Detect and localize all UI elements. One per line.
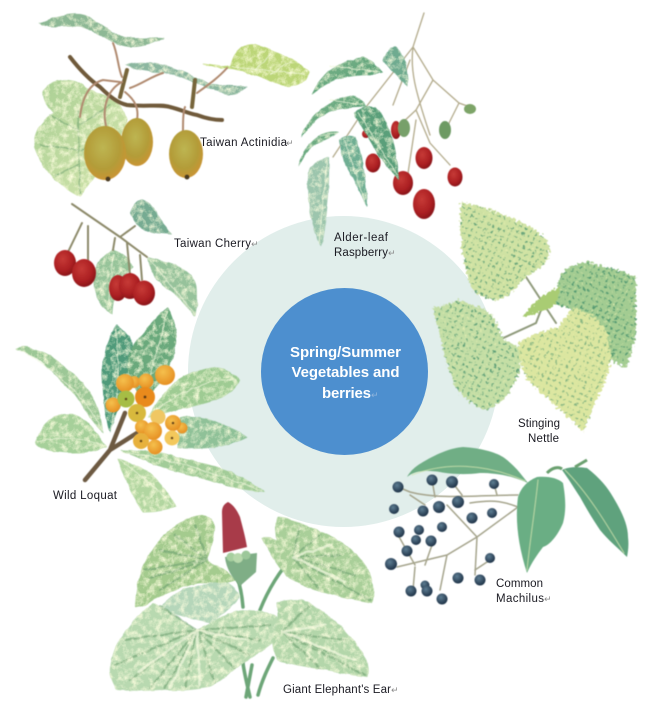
raspberry stems — [333, 13, 470, 180]
raspberry leaves — [298, 47, 408, 247]
machilus leaves — [407, 447, 628, 573]
elephant ear stems — [237, 557, 293, 697]
elephant ear leaves — [110, 515, 373, 691]
label: Alder-leaf Raspberry — [334, 232, 396, 259]
label: Taiwan Cherry: ↵ — [251, 240, 259, 250]
machilus berries — [385, 474, 499, 604]
inner blue circle with title: ↵ — [371, 391, 379, 401]
plant: Taiwan Actinidia — [34, 14, 310, 197]
label: Taiwan Actinidia: Taiwan Actinidia — [200, 137, 288, 149]
label: Stinging Nettle: Stinging — [518, 418, 560, 430]
inner blue circle with title: berries — [322, 385, 371, 402]
label: Taiwan Cherry: Taiwan Cherry — [174, 238, 251, 250]
nettle stems — [499, 277, 556, 340]
label: Stinging Nettle — [518, 418, 560, 445]
actinidia branch — [70, 43, 227, 132]
label: Alder-leaf Raspberry: Alder-leaf — [334, 232, 389, 244]
raspberry berries — [362, 104, 476, 219]
plant: Taiwan Cherry — [54, 200, 197, 317]
loquat leaves — [15, 307, 265, 512]
label: Giant Elephant's Ear: Giant Elephant's Ear — [283, 684, 391, 696]
inner blue circle with title — [261, 288, 428, 455]
loquat fruits — [106, 365, 188, 454]
outer pale circle — [188, 216, 499, 527]
label: Wild Loquat: Wild Loquat — [53, 490, 118, 502]
cherry leaves — [93, 200, 197, 317]
plant: Alder-leaf Raspberry — [298, 13, 476, 247]
plant: Stinging Nettle — [433, 202, 636, 432]
label: Common Machilus: ↵ — [544, 595, 552, 605]
machilus branches — [397, 480, 518, 590]
label: Giant Elephant's Ear: ↵ — [391, 686, 399, 696]
label: Alder-leaf Raspberry: ↵ — [388, 249, 396, 259]
inner blue circle with title: Spring/Summer — [290, 344, 401, 361]
cherry fruits — [54, 250, 155, 306]
label: Common Machilus: Machilus — [496, 593, 544, 605]
inner blue circle with title: Vegetables and — [292, 364, 400, 381]
plant: Wild Loquat — [15, 307, 265, 512]
elephant ear sheath and spadix — [222, 502, 257, 586]
label: Common Machilus — [496, 578, 552, 605]
label: Common Machilus: Common — [496, 578, 543, 590]
nettle leaves — [433, 202, 636, 432]
label: Stinging Nettle: Nettle — [528, 433, 559, 445]
plant: Common Machilus — [385, 447, 628, 604]
actinidia fruits — [84, 118, 203, 182]
actinidia leaves — [34, 14, 310, 197]
loquat branch — [85, 413, 137, 480]
cherry stems — [68, 204, 147, 280]
plant: Giant Elephant's Ear — [110, 502, 373, 697]
label: Taiwan Actinidia: ↵ — [286, 139, 294, 149]
label: Alder-leaf Raspberry: Raspberry — [334, 247, 388, 259]
